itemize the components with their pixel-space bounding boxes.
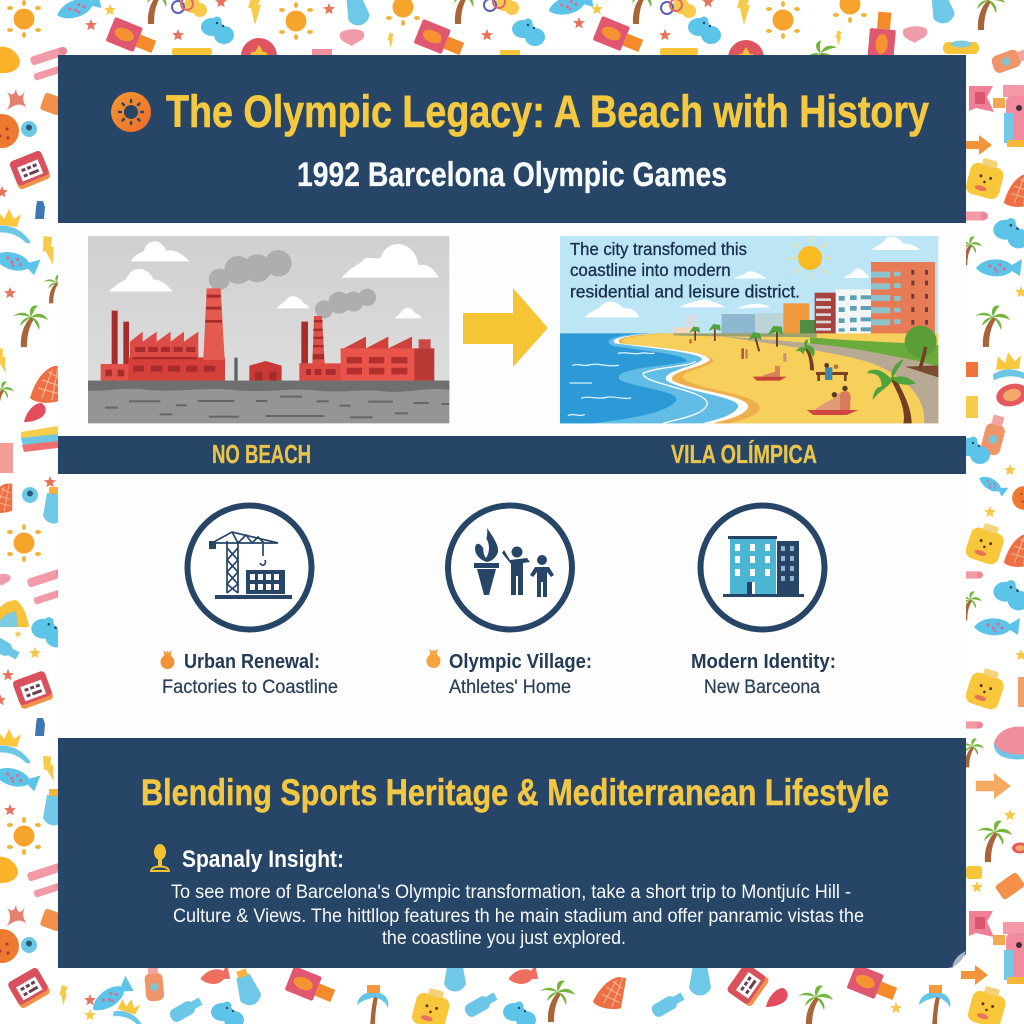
text: transformation caption [570, 239, 800, 301]
illustration: modern beach after transformation [560, 236, 938, 423]
text: transformation caption: residential and leisure district. [570, 281, 800, 301]
benefit: urban renewal: Factories to Coastline [162, 677, 338, 698]
benefit: olympic village [426, 649, 592, 698]
icon: orange sun badge [111, 92, 151, 132]
illustration: grey industrial factories before [88, 236, 449, 423]
benefit: olympic village: Athletes' Home [449, 677, 571, 698]
bottom navy panel [58, 738, 966, 968]
label: vila olimpica: VILA OLÍMPICA [671, 439, 817, 469]
benefit: modern identity: New Barceona [704, 677, 820, 698]
insight paragraph: To see more of Barcelona's Olympic transformation, take a short trip to Montjuíc Hill - [171, 882, 851, 903]
benefit: olympic village: Olympic Village: [449, 651, 592, 673]
benefit: modern identity [691, 651, 836, 698]
label: no beach: NO BEACH [212, 439, 311, 469]
beachgoers on towels and bench [689, 339, 858, 415]
benefit: modern identity: Modern Identity: [691, 651, 836, 673]
insight paragraph: the coastline you just explored. [382, 928, 626, 949]
insight paragraph: Culture & Views. The hittllop features th he main stadium and offer panramic vistas the [173, 906, 864, 927]
icon: construction crane and building [188, 506, 312, 630]
text: transformation caption: The city transfomed this [570, 239, 747, 259]
navy label strip [58, 436, 966, 474]
palm trees [689, 324, 927, 423]
heading: blending sports heritage: Blending Sports Heritage & Mediterranean Lifestyle [141, 772, 889, 813]
main white panel [58, 223, 966, 738]
header banner [58, 55, 966, 223]
subtitle: 1992 Barcelona Olympic Games [297, 156, 727, 194]
icon: insight pin [151, 844, 169, 871]
benefit: urban renewal [160, 650, 338, 698]
icon: medal [426, 649, 440, 668]
insight paragraph [171, 882, 864, 949]
page curl corner [948, 951, 966, 968]
icon: modern apartment buildings [700, 506, 824, 630]
arrow: before to after [463, 288, 548, 367]
text: transformation caption: coastline into modern [570, 260, 731, 280]
icon: medal [160, 650, 174, 669]
distant and near apartment buildings [673, 262, 935, 345]
benefit: urban renewal: Urban Renewal: [184, 651, 320, 673]
icon: olympic torch and athletes [448, 506, 572, 630]
heading: spanaly insight: Spanaly Insight: [182, 846, 344, 873]
